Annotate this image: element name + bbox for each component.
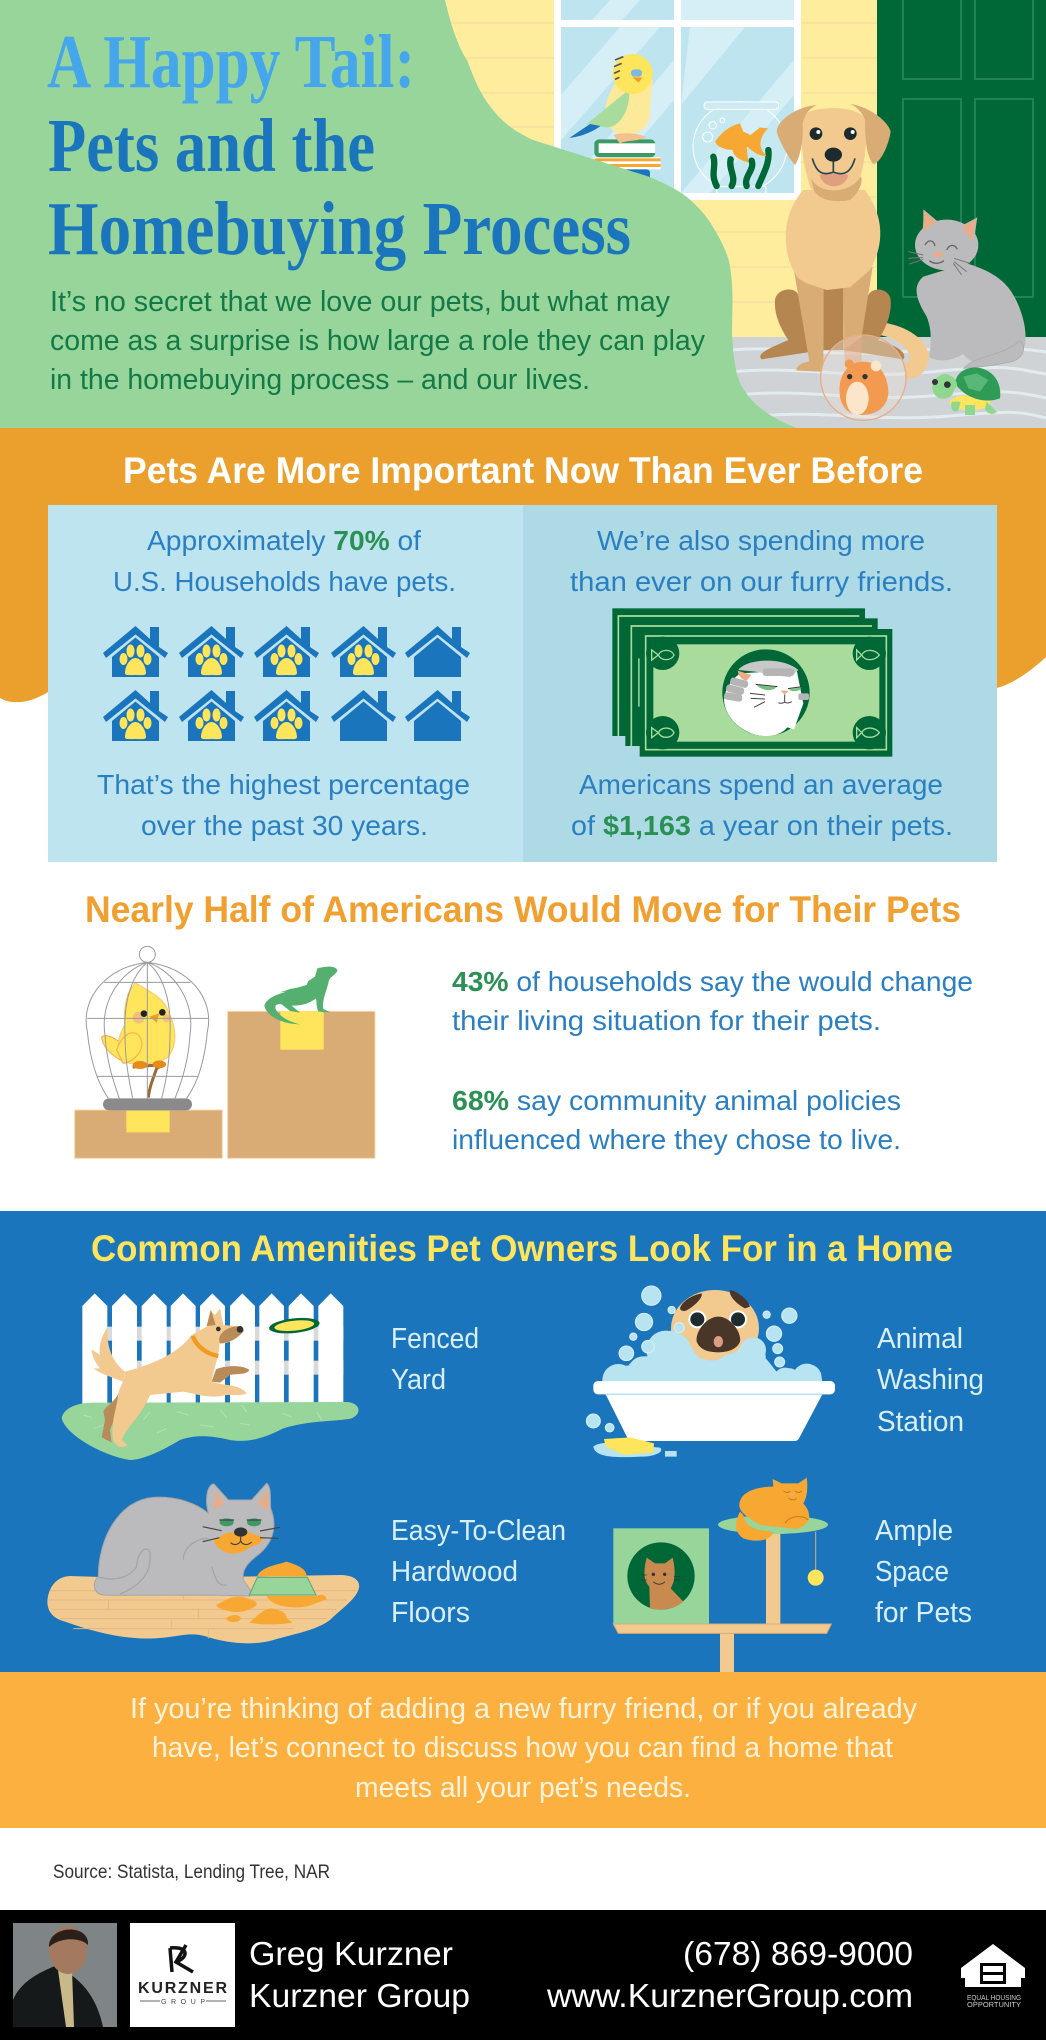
contact: (678) 869-9000 bbox=[683, 1935, 913, 1972]
title: Homebuying Process bbox=[48, 187, 631, 271]
heading: pets more important: Pets Are More Important Now Than Ever Before bbox=[123, 450, 923, 491]
text: spending more: than ever on our furry friends. bbox=[570, 566, 953, 597]
turtle bbox=[932, 368, 1000, 415]
window bbox=[554, 0, 801, 200]
source: Source: Statista, Lending Tree, NAR bbox=[53, 1862, 330, 1883]
logo: KURZNER bbox=[138, 1980, 227, 1997]
label: ample space: for Pets bbox=[875, 1597, 972, 1629]
label: hardwood floors: Hardwood bbox=[391, 1556, 518, 1588]
text: approximately 70 percent bbox=[113, 525, 456, 597]
icon: equal housing opportunity bbox=[961, 1944, 1025, 2009]
icon: equal housing opportunity: EQUAL HOUSING bbox=[967, 1993, 1021, 2002]
text: approximately 70 percent: U.S. Households have pets. bbox=[113, 566, 456, 597]
label: hardwood floors bbox=[391, 1515, 566, 1629]
goldfish bowl bbox=[693, 102, 787, 193]
illustration: bird cage and iguana on boxes bbox=[75, 946, 375, 1158]
agent name bbox=[249, 1935, 470, 2014]
text: americans spend: of $1,163 a year on their pets. bbox=[571, 810, 953, 841]
text: spending more: We’re also spending more bbox=[597, 525, 925, 556]
illustration: cat tree bbox=[613, 1478, 831, 1672]
illustration: pug in bathtub bbox=[586, 1286, 835, 1457]
callout: connect: If you’re thinking of adding a new furry friend, or if you already bbox=[130, 1693, 917, 1725]
stat: 68 percent: influenced where they chose to live. bbox=[452, 1124, 901, 1155]
stat: 43 percent: their living situation for their pets. bbox=[452, 1005, 881, 1036]
title: Pets and the bbox=[48, 104, 375, 188]
footer bar bbox=[0, 1910, 1046, 2040]
label: fenced yard bbox=[391, 1323, 479, 1396]
text: highest percentage: over the past 30 years. bbox=[141, 810, 428, 841]
panel: amenities bbox=[0, 1211, 1046, 1672]
iguana bbox=[264, 967, 337, 1024]
stat: 68 percent: 68% say community animal policies bbox=[452, 1085, 901, 1116]
label: animal washing station bbox=[877, 1323, 984, 1438]
golden retriever bbox=[760, 104, 904, 372]
heading: would move: Nearly Half of Americans Would Move for Their Pets bbox=[85, 889, 961, 930]
header illustration: porch with pets bbox=[430, 0, 1046, 429]
label: ample space: Space bbox=[875, 1556, 949, 1588]
intro text: come as a surprise is how large a role they can play bbox=[50, 325, 705, 357]
label: hardwood floors: Easy-To-Clean bbox=[391, 1515, 566, 1547]
contact bbox=[546, 1935, 913, 2014]
label: animal washing station: Washing bbox=[877, 1364, 984, 1396]
label: animal washing station: Animal bbox=[877, 1323, 963, 1355]
label: fenced yard: Fenced bbox=[391, 1323, 479, 1355]
logo: GROUP bbox=[161, 1999, 205, 2006]
intro text: It’s no secret that we love our pets, but what may bbox=[50, 286, 670, 318]
stat: 43 percent: 43% of households say the would change bbox=[452, 966, 973, 997]
text: spending more bbox=[570, 525, 953, 597]
door bbox=[877, 0, 1046, 340]
text: americans spend bbox=[571, 769, 953, 841]
stat: 43 percent bbox=[452, 966, 973, 1036]
icon: stack of cat dollar bills bbox=[612, 608, 892, 757]
agent photo bbox=[13, 1923, 117, 2027]
logo bbox=[130, 1923, 235, 2027]
illustration: cat on hardwood floor bbox=[47, 1483, 359, 1643]
text: highest percentage bbox=[97, 769, 470, 841]
illustration: dog and fence bbox=[62, 1293, 359, 1460]
text: highest percentage: That’s the highest percentage bbox=[97, 769, 470, 800]
panel: 70 percent households bbox=[48, 505, 523, 862]
callout: connect bbox=[0, 1672, 1046, 1828]
cage bbox=[86, 946, 209, 1110]
title bbox=[47, 20, 631, 271]
stats text bbox=[452, 966, 973, 1155]
box: tall bbox=[228, 1011, 375, 1158]
heading: amenities: Common Amenities Pet Owners Look For in a Home bbox=[91, 1228, 953, 1269]
contact: www.KurznerGroup.com bbox=[546, 1977, 913, 2014]
floor bbox=[720, 337, 1046, 429]
cockatiel bbox=[102, 983, 175, 1098]
panel: pet spending bbox=[523, 505, 997, 862]
dog tail bbox=[880, 323, 929, 379]
gray cat bbox=[908, 209, 1026, 368]
label: animal washing station: Station bbox=[877, 1406, 964, 1438]
agent name: Kurzner Group bbox=[249, 1977, 470, 2014]
text: americans spend: Americans spend an average bbox=[579, 769, 943, 800]
label: ample space: Ample bbox=[875, 1515, 953, 1547]
green header blob bbox=[0, 0, 797, 428]
label: ample space bbox=[875, 1515, 972, 1629]
box: small bbox=[75, 1110, 222, 1158]
callout: connect: have, let’s connect to discuss how you can find a home that bbox=[152, 1732, 893, 1764]
hamster in ball bbox=[821, 335, 906, 420]
agent name: Greg Kurzner bbox=[249, 1935, 453, 1972]
orange band bbox=[0, 428, 1046, 702]
icon: equal housing opportunity: OPPORTUNITY bbox=[967, 2000, 1021, 2009]
intro text: in the homebuying process – and our lives. bbox=[50, 364, 590, 396]
text: approximately 70 percent: Approximately 70% of bbox=[147, 525, 421, 556]
callout: connect: meets all your pet’s needs. bbox=[355, 1772, 691, 1804]
intro text bbox=[50, 286, 705, 396]
icons: house grid with paws bbox=[103, 626, 470, 741]
parakeet on books bbox=[569, 54, 661, 183]
house wall bbox=[430, 0, 880, 340]
label: hardwood floors: Floors bbox=[391, 1597, 470, 1629]
label: fenced yard: Yard bbox=[391, 1364, 446, 1396]
stat: 68 percent bbox=[452, 1085, 901, 1155]
title: A Happy Tail: bbox=[47, 20, 415, 104]
